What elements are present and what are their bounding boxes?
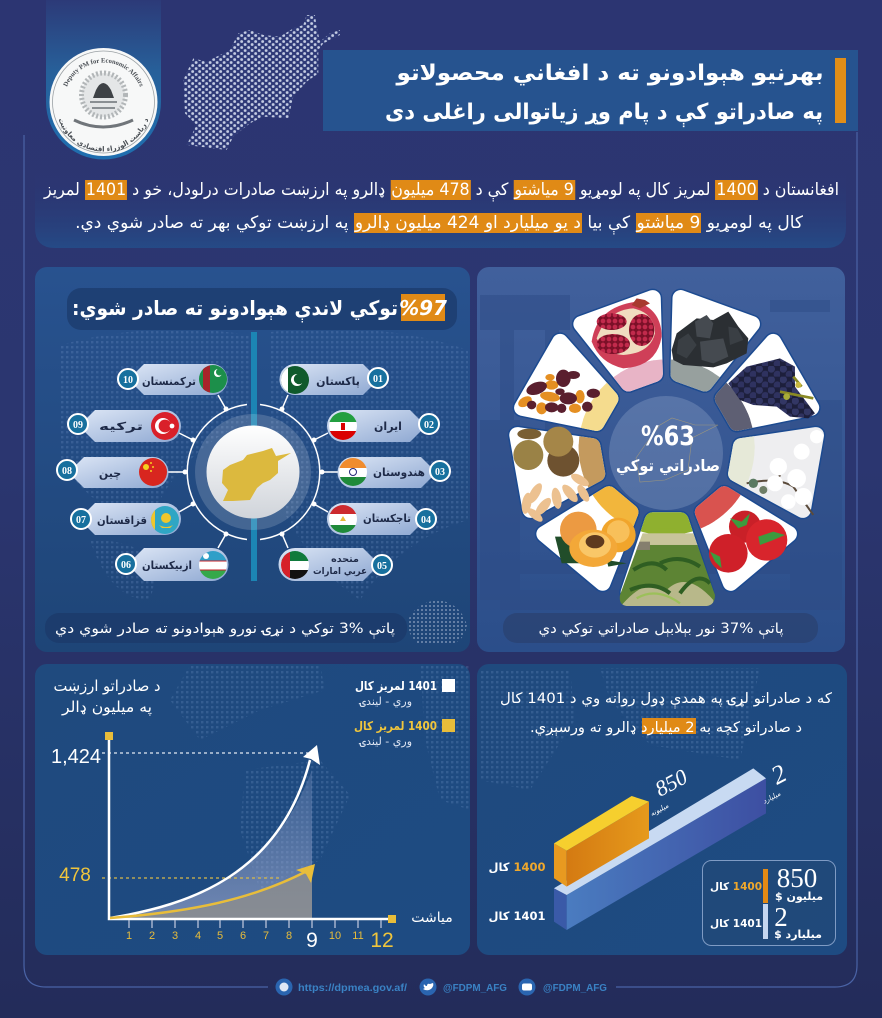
bar labels [488, 860, 546, 923]
intro text [43, 180, 839, 234]
twitter link: @FDPM_AFG [443, 982, 507, 994]
axis values [51, 746, 453, 952]
youtube link [518, 978, 607, 996]
pill 05 UAE: عربي امارات [313, 566, 367, 577]
curve 1400 [110, 864, 315, 918]
legend: 1401 لمریز کال [355, 679, 437, 693]
pill 01 Pakistan: پاکستان [316, 375, 360, 388]
pill 06 Uzbekistan: ازبیکستان [142, 559, 192, 572]
title: په صادراتو کې د پام وړ زیاتوالی راغلی دی [385, 100, 823, 127]
guide lines [102, 753, 312, 878]
description [500, 691, 832, 736]
pill 02 Iran: ایران [374, 420, 402, 433]
header band [323, 50, 858, 131]
axis values: 7 [263, 930, 269, 942]
pill 10 Turkmenistan: 10 [123, 375, 133, 386]
pill 01 Pakistan [280, 364, 388, 395]
curve 1401 [110, 745, 320, 918]
intro line 2: کال په لومړیو 9 میاشتو کې بیا د یو میلیارد او 424 میلیون ډالرو په ارزښت توکي بهر ته صادر شوي دي. [75, 213, 803, 233]
isometric labels: میلیارد [761, 790, 782, 806]
globe graphic [407, 600, 467, 644]
accent bar [835, 58, 846, 123]
footer note [503, 613, 818, 643]
axis values: 2 [149, 930, 155, 942]
panel: line chart [35, 664, 470, 955]
website link: https://dpmea.gov.af/ [298, 982, 407, 994]
description: د صادراتو کچه به 2 میلیارد ډالرو ته ورسېږي. [530, 720, 802, 736]
legend: 1400 لمریز کال [354, 719, 437, 733]
world dot map background [480, 668, 760, 790]
pill 07 Kazakhstan [71, 503, 181, 535]
pill 09 Turkey [68, 410, 181, 442]
title [385, 61, 824, 127]
twitter link [420, 978, 507, 996]
pill 05 UAE: 05 [377, 561, 387, 572]
pill 08 China: چین [99, 467, 121, 480]
title: بهرنیو هېوادونو ته د افغاني محصولاتو [395, 61, 824, 86]
pill 03 India: 03 [435, 467, 445, 478]
axis values: 6 [240, 930, 246, 942]
photo: tomatoes [709, 511, 787, 573]
axis values: میاشت [411, 910, 453, 926]
pill 07 Kazakhstan: قزاقستان [97, 514, 147, 527]
legend: وري - لیندۍ [359, 735, 412, 748]
page frame [24, 132, 857, 987]
pill 10 Turkmenistan [118, 364, 227, 395]
axis values: 478 [59, 865, 91, 886]
pill 06 Uzbekistan [116, 548, 228, 581]
intro text box [35, 168, 846, 248]
pill 10 Turkmenistan: ترکمنستان [142, 375, 196, 388]
photo: cotton [747, 430, 823, 515]
axis values: 1,424 [51, 746, 101, 768]
axis values: 9 [306, 929, 318, 952]
world dot map background [60, 329, 468, 600]
3D bars [554, 768, 766, 930]
axes [105, 732, 396, 928]
panel: countries [35, 267, 470, 652]
bar labels: 1401 کال [488, 909, 546, 923]
footer note: پاتې %3 توکي د نړۍ نورو هېوادونو ته صادر شوي دي [55, 621, 395, 639]
pill 05 UAE [278, 548, 392, 581]
axis values: 10 [329, 930, 341, 942]
centre Afghanistan map [195, 414, 311, 530]
ring with connectors [168, 395, 338, 548]
pill 09 Turkey: 09 [73, 420, 83, 431]
legend [354, 679, 455, 748]
description: که د صادراتو لړۍ په همدې ډول روانه وي د 1401 کال [500, 691, 832, 709]
pill 04 Tajikistan: تاجکستان [363, 512, 411, 525]
pill 06 Uzbekistan: 06 [121, 560, 131, 571]
area under curves [110, 770, 312, 919]
photo: figs and pine nuts [513, 427, 592, 524]
photo: pomegranate [592, 298, 662, 368]
footer links [276, 978, 607, 996]
photo: apricots [555, 512, 636, 567]
axis values: 5 [217, 930, 223, 942]
heading: توکي لاندې هېوادونو ته صادر شوي: [72, 296, 398, 323]
value card: میلیون $ [775, 890, 823, 903]
centre circle: 63%: %63 [641, 421, 695, 452]
chart title: د صادراتو ارزښت [54, 677, 160, 695]
pill 08 China: 08 [62, 466, 72, 477]
panel: bar comparison [477, 664, 847, 955]
header: ministry seal [46, 4, 161, 160]
axis values: 1 [126, 930, 132, 942]
chart title [54, 677, 160, 717]
pill 02 Iran [327, 410, 439, 442]
heading [67, 288, 457, 330]
axis values: 4 [195, 930, 201, 942]
legend: وري - لیندۍ [359, 695, 412, 708]
world dot map background [170, 664, 470, 890]
photo: coal [672, 312, 748, 367]
photo: field [618, 533, 718, 607]
value card: 1401 کال [710, 918, 762, 930]
value card: 2 [774, 902, 788, 932]
pill 03 India: هندوستان [373, 466, 425, 479]
pill 08 China [57, 457, 168, 488]
centre vertical bar [251, 332, 257, 581]
axis values: 8 [286, 930, 292, 942]
intro line 1: افغانستان د 1400 لمریز کال په لومړیو 9 میاشتو کې د 478 میلیون ډالرو په ارزښت صادرات درلودل، خو د 1401 لمریز [44, 180, 839, 200]
footer note [45, 613, 407, 643]
pill 01 Pakistan: 01 [373, 374, 383, 385]
photo: grapes [728, 358, 815, 418]
value card: میلیارد $ [774, 928, 822, 941]
faded port background [480, 295, 842, 610]
pill 03 India [338, 457, 450, 488]
pill 04 Tajikistan [327, 503, 436, 535]
panel: export goods [477, 267, 845, 652]
header: ministry seal: Deputy PM for Economic Affairs [63, 58, 143, 87]
footer note: پاتې %37 نور بېلابېل صادراتي توکي دي [538, 621, 784, 639]
pill 07 Kazakhstan: 07 [76, 515, 86, 526]
centre circle: 63% [609, 396, 723, 510]
value card: 1400 کال [710, 881, 762, 893]
axis values: 11 [352, 930, 364, 942]
header: ministry seal: د رياست الوزراء اقتصادي معاونيت [59, 119, 148, 152]
pill 04 Tajikistan: 04 [421, 515, 431, 526]
isometric labels: 850 [651, 764, 691, 801]
centre circle: 63%: صادراتي توکي [616, 456, 720, 476]
pill 09 Turkey: ترکیه [99, 420, 143, 433]
axis values: 12 [370, 929, 394, 952]
isometric labels [649, 759, 791, 818]
photo: dried fruit [516, 370, 600, 414]
isometric labels: 2 [766, 759, 791, 790]
header: dotted Afghanistan map [183, 15, 340, 150]
value card [702, 860, 836, 946]
heading: %97 [399, 296, 447, 320]
isometric labels: میلیونه [649, 802, 670, 818]
youtube link: @FDPM_AFG [543, 982, 607, 994]
bar labels: 1400 کال [488, 860, 546, 874]
website link [276, 978, 407, 996]
value card: 850 [777, 863, 817, 893]
nine product petals [513, 298, 823, 607]
pill 05 UAE: متحده [331, 554, 359, 565]
chart title: په میلیون ډالر [61, 698, 152, 717]
pill 02 Iran: 02 [424, 420, 434, 431]
axis values: 3 [172, 930, 178, 942]
